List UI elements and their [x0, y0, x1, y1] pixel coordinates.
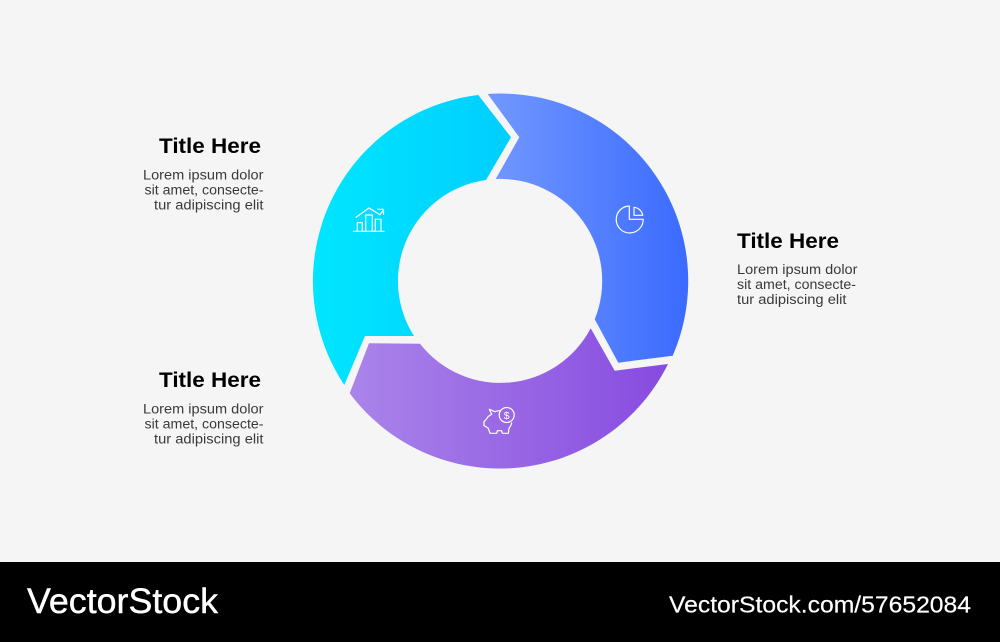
footer bar: [0, 562, 1000, 642]
body text: sit amet, consecte-: [144, 416, 264, 432]
coin symbol: $: [504, 410, 510, 422]
segment: cyan arrow: [313, 95, 511, 385]
body text: [737, 262, 858, 307]
heading: Title Here: [159, 369, 261, 392]
body text: tur adipiscing elit: [154, 198, 264, 212]
segment: blue arrow: [488, 94, 688, 363]
body text: tur adipiscing elit: [154, 432, 264, 446]
body text: [143, 167, 264, 212]
heading: Title Here: [159, 135, 261, 158]
icon: piggy bank with coin: [484, 408, 514, 433]
segment: purple arrow: [350, 328, 668, 469]
body text: Lorem ipsum dolor: [737, 262, 858, 277]
body text: sit amet, consecte-: [144, 182, 264, 198]
text block: top left: [143, 135, 264, 212]
text block: bottom left: [143, 369, 264, 446]
icon: bar chart with rising arrow: [354, 208, 384, 231]
icon: pie chart: [616, 206, 643, 233]
text block: right: [737, 230, 858, 307]
footer url: VectorStock.com/57652084: [669, 592, 971, 618]
heading: Title Here: [737, 230, 839, 253]
body text: sit amet, consecte-: [737, 277, 856, 292]
body text: Lorem ipsum dolor: [143, 401, 264, 416]
body text: Lorem ipsum dolor: [143, 167, 264, 182]
body text: [143, 401, 264, 446]
footer logo: VectorStock: [27, 582, 219, 621]
body text: tur adipiscing elit: [737, 292, 847, 307]
donut cycle chart: [313, 94, 688, 469]
